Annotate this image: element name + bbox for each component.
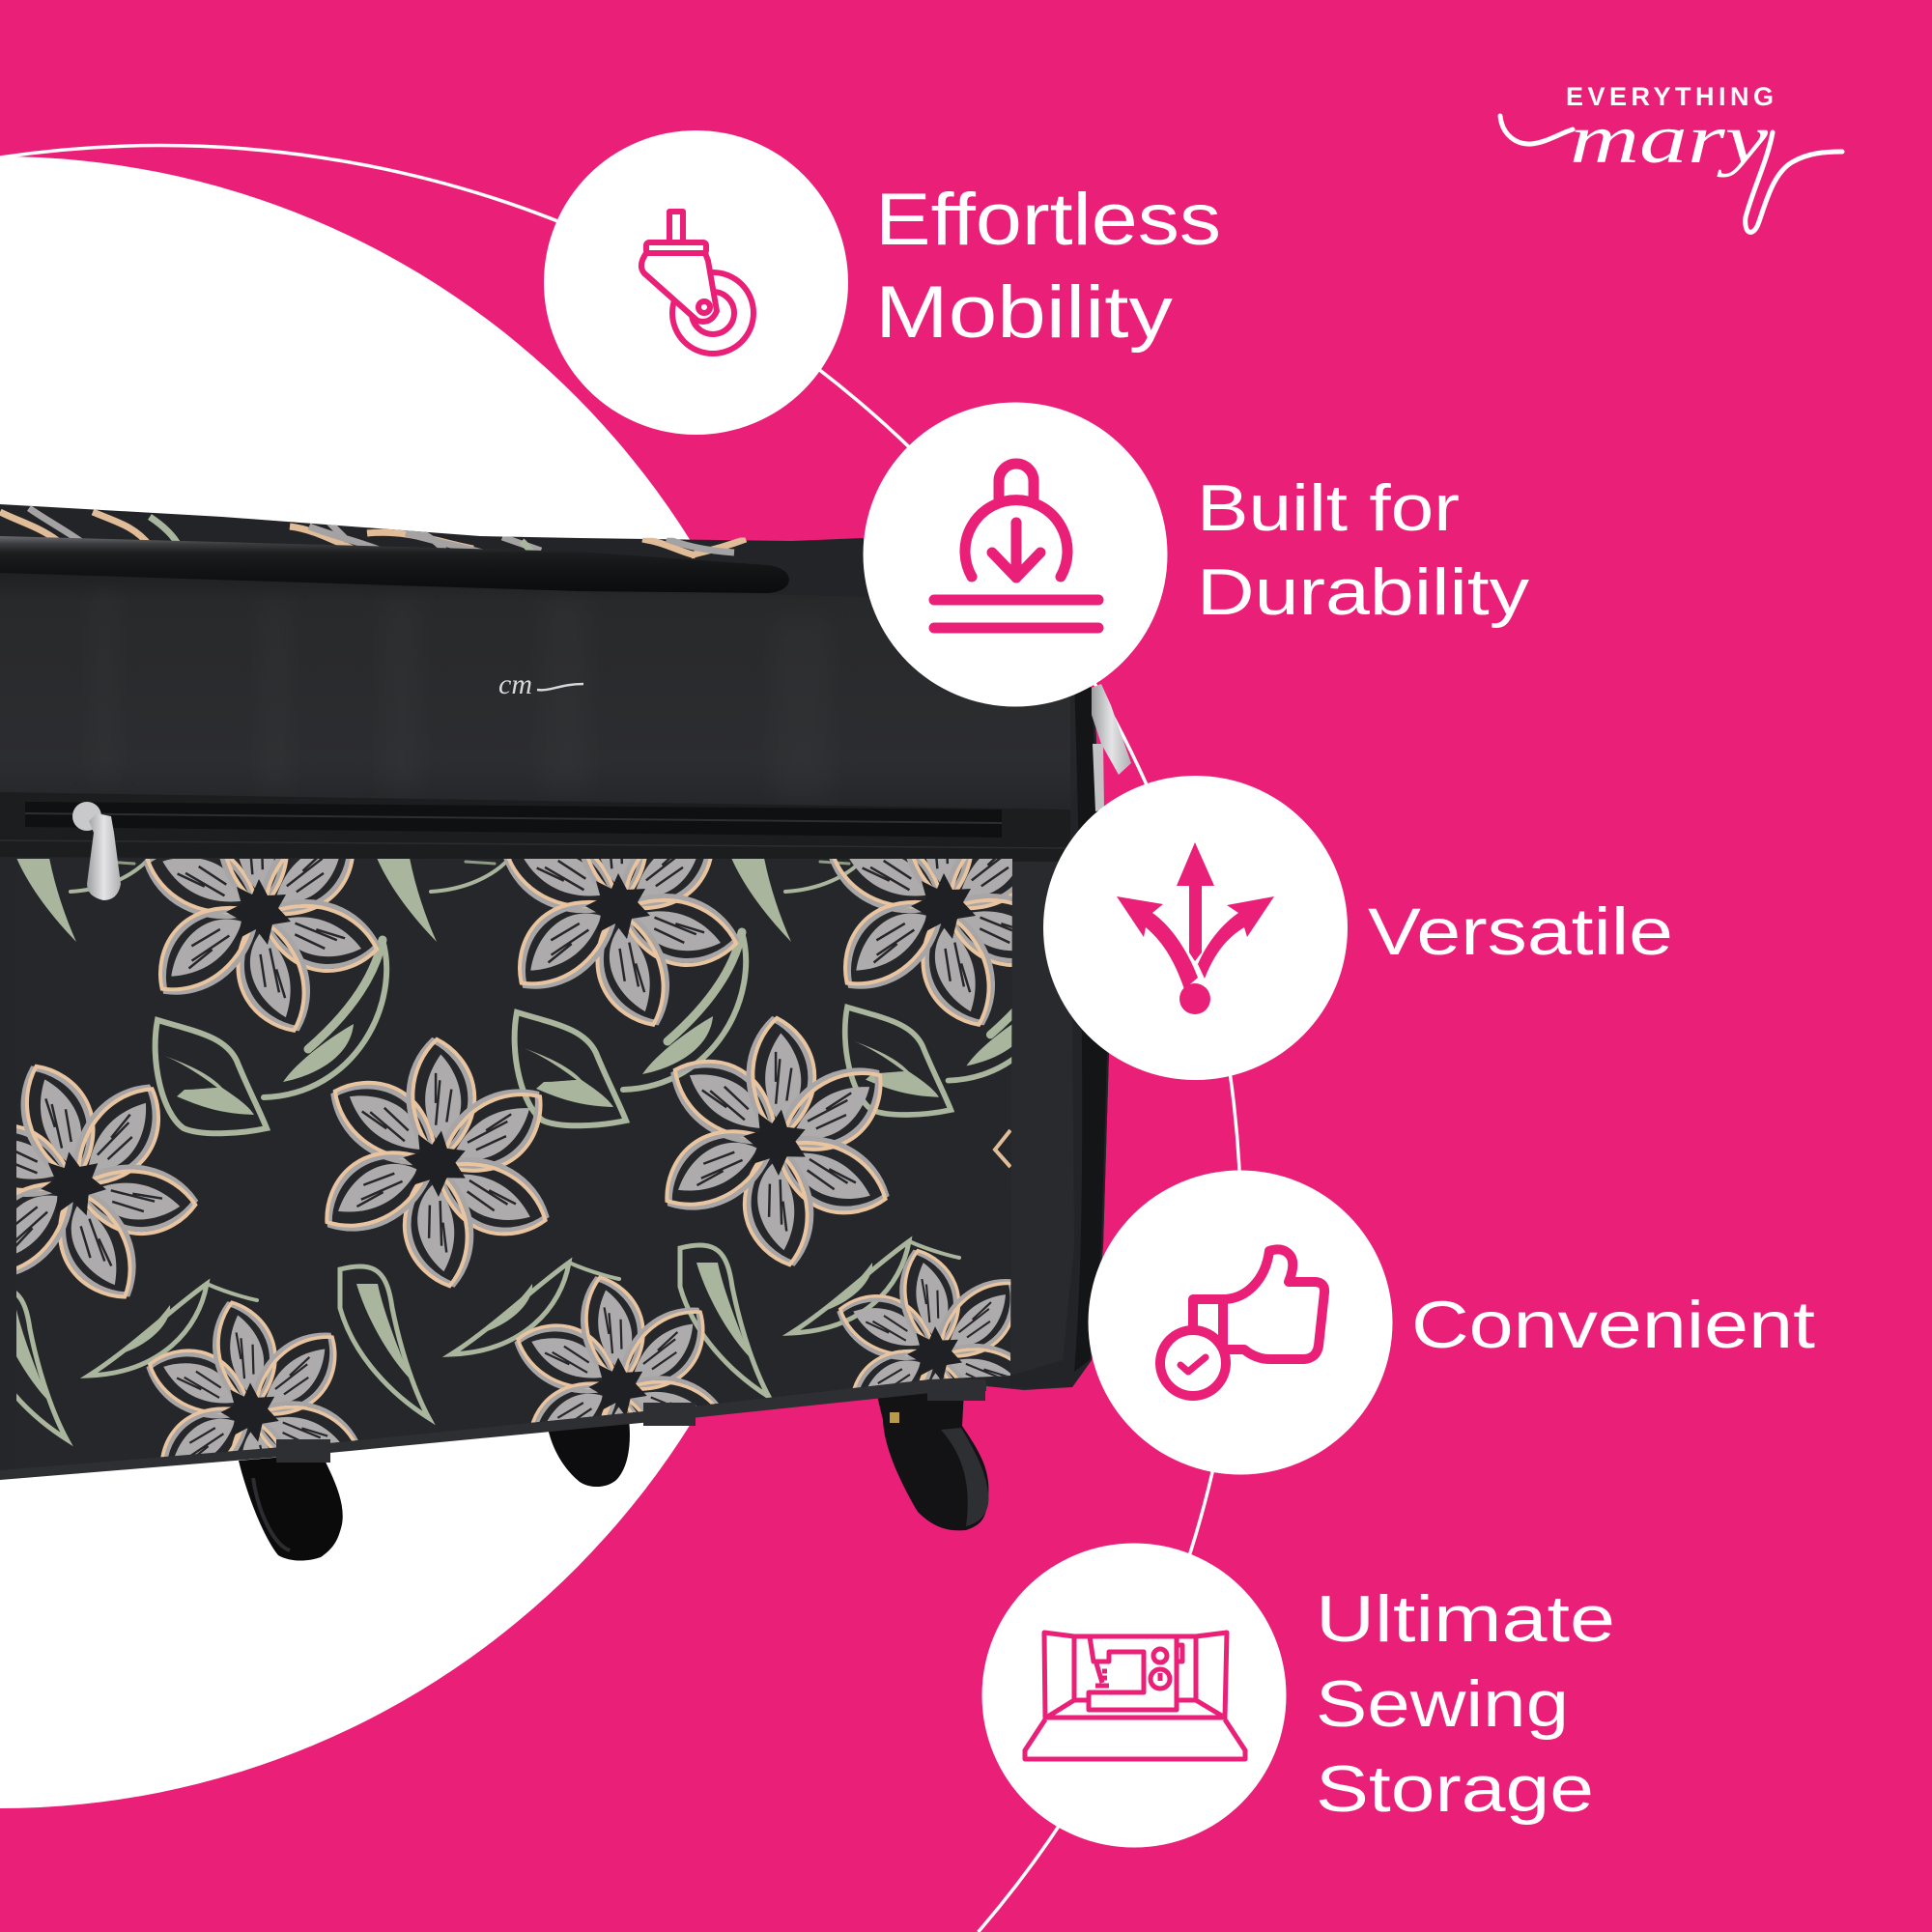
padded lid with print bbox=[0, 504, 869, 597]
side panel lower fold bbox=[1010, 811, 1074, 1376]
wheel: front left bbox=[239, 1454, 343, 1561]
heading: Convenient: Convenient bbox=[1411, 1288, 1815, 1362]
front zipper pull bbox=[72, 802, 121, 900]
heading: Built for Durability: Built for bbox=[1197, 471, 1460, 545]
heading: Ultimate Sewing Storage: Ultimate bbox=[1316, 1582, 1615, 1656]
side zipper pull bbox=[1092, 684, 1131, 811]
icon: sewing machine in open case bbox=[1025, 1633, 1245, 1759]
floral print bbox=[0, 782, 1069, 1520]
product: rolling sewing case bbox=[0, 504, 1131, 1561]
feature: Ultimate Sewing Storage bbox=[981, 1544, 1615, 1847]
logo wordmark top: EVERYTHING bbox=[1566, 82, 1774, 111]
icon circle bbox=[1043, 776, 1348, 1080]
caster wheels bbox=[239, 1391, 988, 1561]
flowers row one bbox=[156, 940, 386, 1133]
heading: Effortless Mobility: Mobility bbox=[875, 271, 1173, 354]
feature: Built for Durability bbox=[864, 402, 1529, 707]
icon circle bbox=[981, 1544, 1287, 1847]
icon: weight on layers bbox=[934, 464, 1098, 628]
heading: Ultimate Sewing Storage: Storage bbox=[1316, 1752, 1594, 1826]
side zipper track bbox=[1074, 676, 1107, 1372]
flowers row three bbox=[147, 1300, 358, 1457]
icon: caster wheel bbox=[641, 212, 753, 354]
flowers row two bbox=[0, 1284, 257, 1439]
top panel bbox=[0, 573, 1070, 809]
feature: Effortless Mobility bbox=[544, 130, 1221, 435]
icon: thumbs up with check bbox=[1160, 1249, 1324, 1396]
connecting curved line bbox=[0, 146, 1240, 1932]
printed pocket panel bbox=[16, 859, 1012, 1457]
heading: Built for Durability: Durability bbox=[1197, 555, 1529, 629]
feature: Versatile bbox=[1043, 776, 1673, 1080]
icon: three way arrows bbox=[1117, 842, 1274, 1014]
wheel housing frame bbox=[0, 1379, 986, 1480]
logo: Everything Mary bbox=[1500, 82, 1842, 232]
side panel bbox=[1010, 696, 1109, 1387]
white background circle bbox=[0, 156, 817, 1808]
zipper band bbox=[0, 792, 1070, 862]
heading: Ultimate Sewing Storage bbox=[1316, 1582, 1615, 1826]
heading: Effortless Mobility: Effortless bbox=[875, 179, 1221, 261]
icon circle bbox=[1088, 1171, 1393, 1474]
icon circle bbox=[544, 130, 848, 435]
brand badge bbox=[498, 668, 583, 700]
wheel: rear middle bbox=[547, 1420, 630, 1487]
logo script: mary bbox=[1570, 100, 1768, 178]
handle bar bbox=[0, 536, 789, 593]
panel creases bbox=[92, 589, 831, 802]
icon circle bbox=[864, 402, 1167, 707]
small top leaves bbox=[16, 858, 150, 942]
heading: Built for Durability bbox=[1197, 471, 1529, 629]
heading: Ultimate Sewing Storage: Sewing bbox=[1316, 1667, 1569, 1741]
brand badge: cm bbox=[498, 668, 532, 700]
heading: Versatile: Versatile bbox=[1368, 895, 1673, 969]
feature: Convenient bbox=[1088, 1171, 1815, 1474]
logo script bbox=[1500, 100, 1842, 232]
main body bbox=[0, 573, 1109, 1476]
wheel: front right bbox=[877, 1391, 988, 1530]
heading: Effortless Mobility bbox=[875, 179, 1221, 354]
